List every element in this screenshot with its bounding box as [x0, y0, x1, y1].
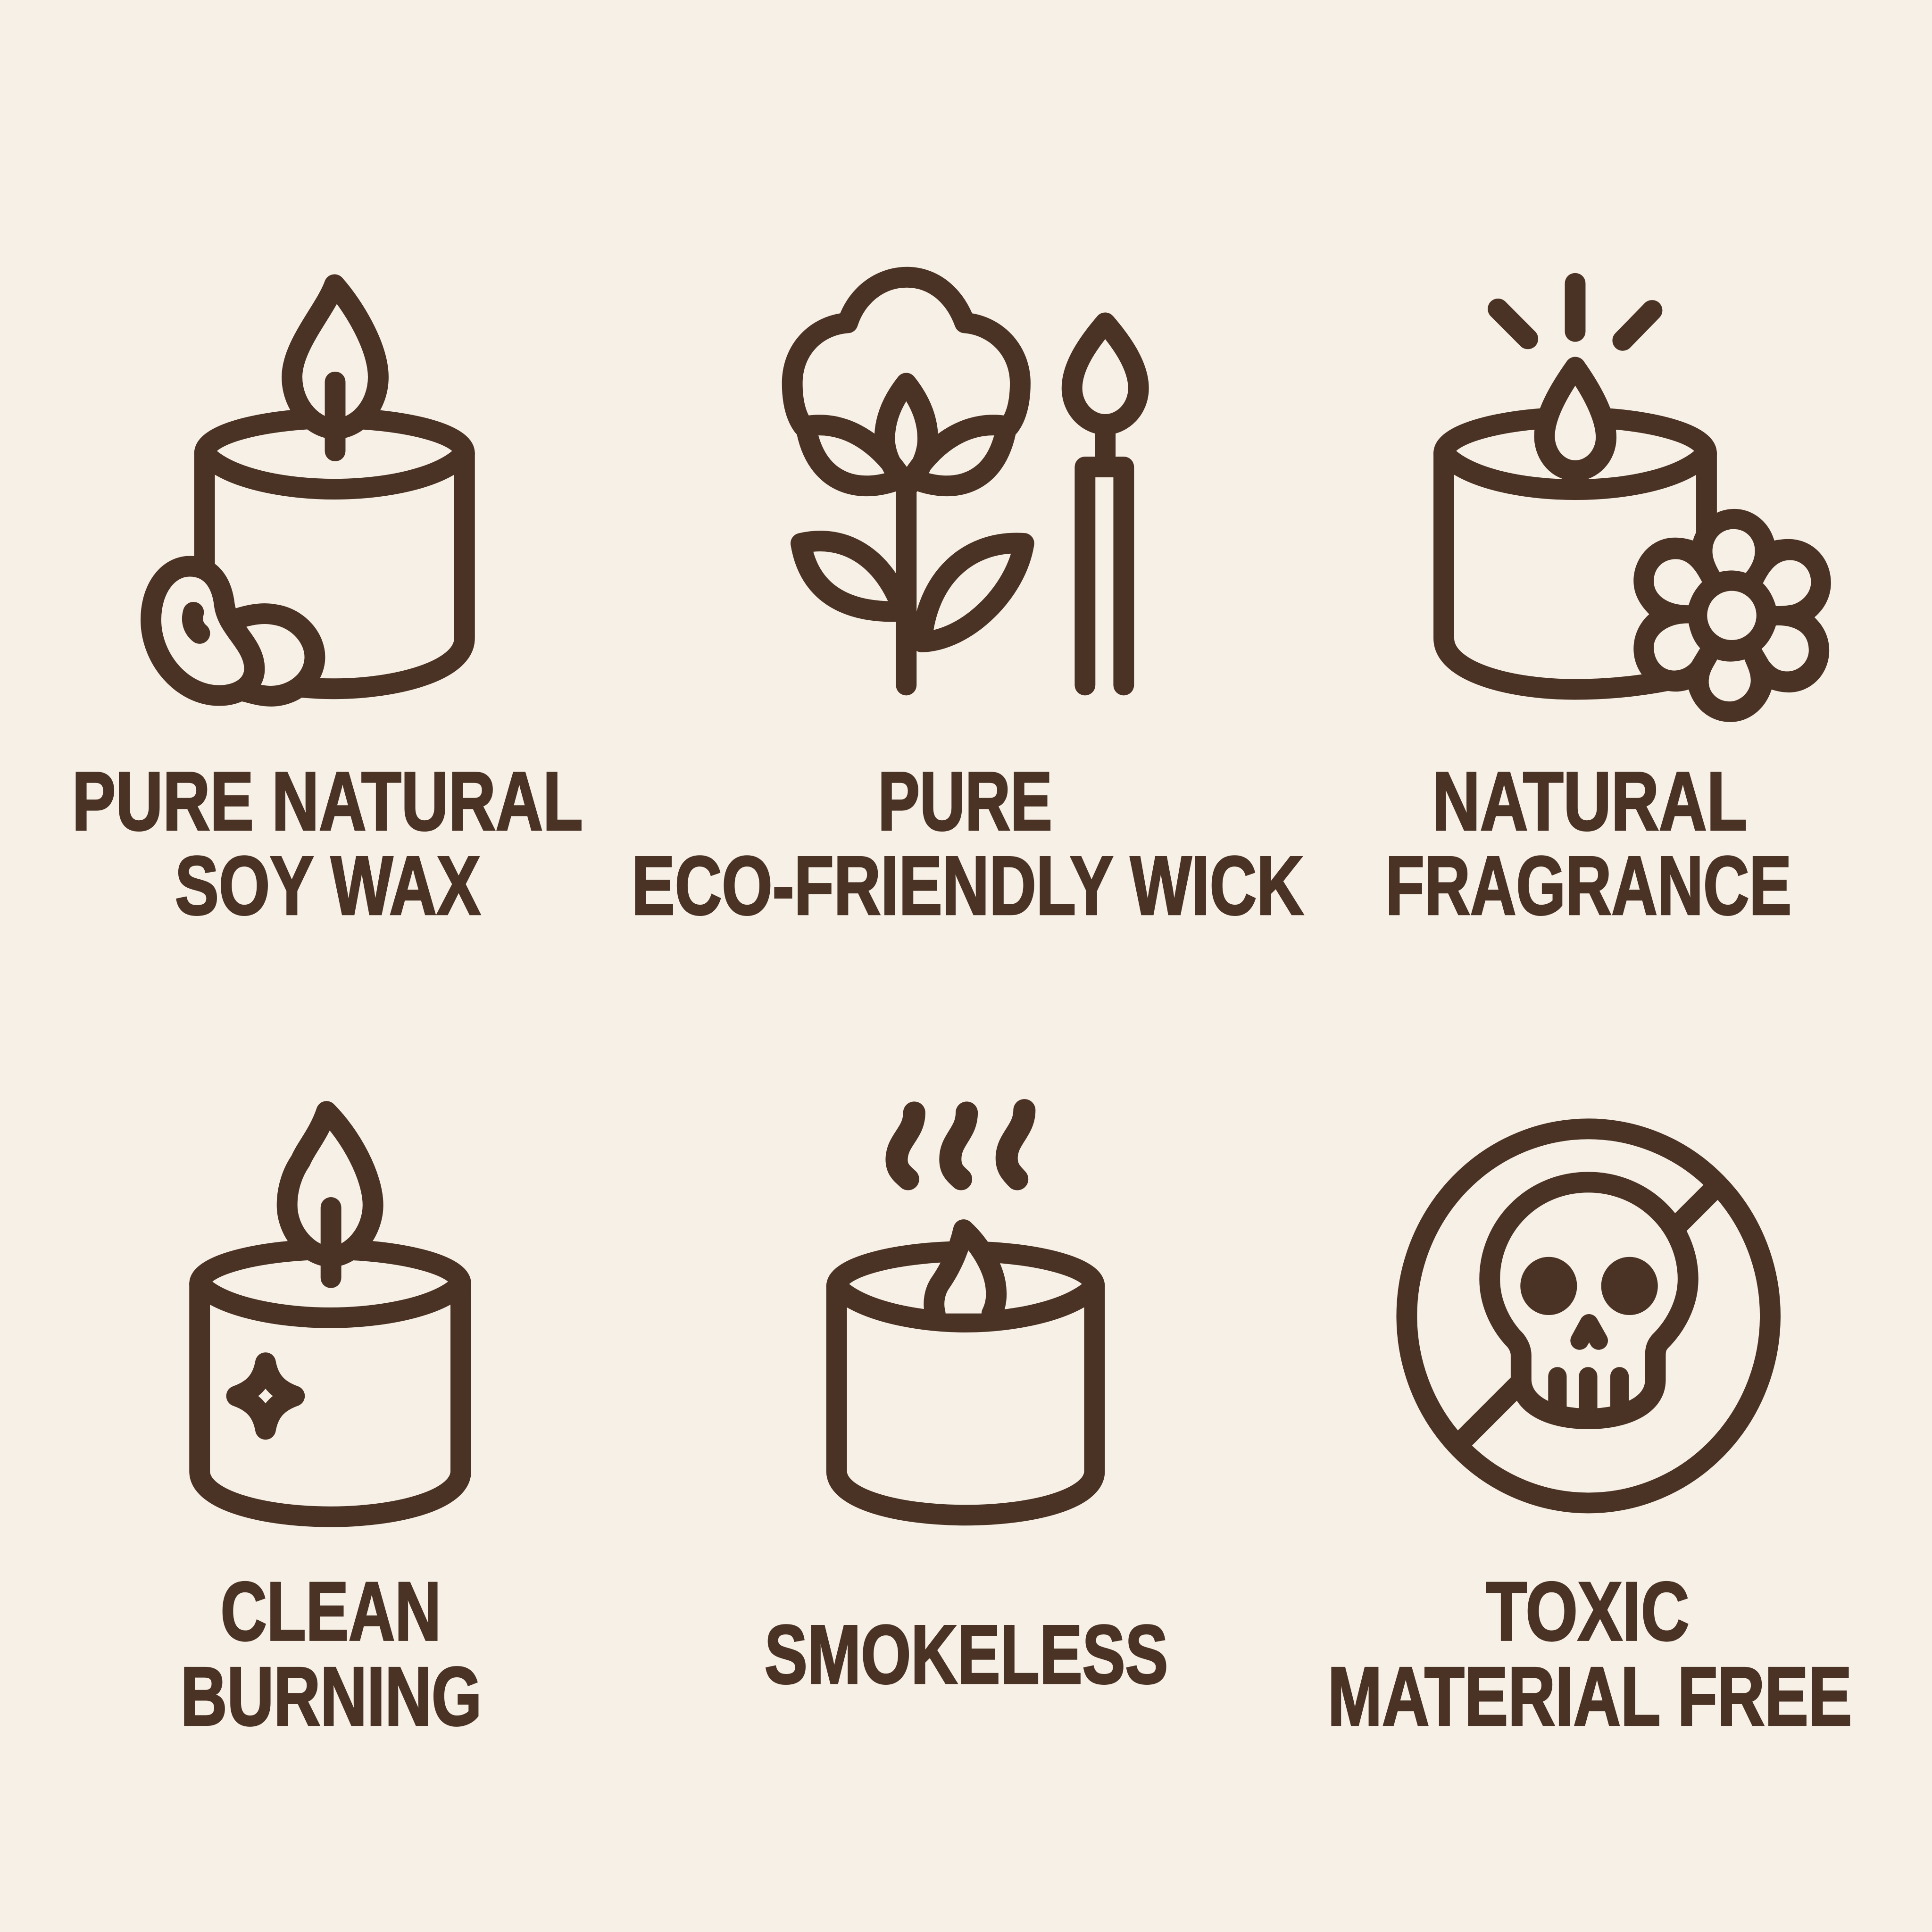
panel: natural fragrance	[1385, 283, 1831, 932]
icon: candle with flower and scent rays	[1444, 283, 1831, 722]
panel: pure natural soy wax	[72, 284, 583, 932]
heading: natural fragrance: FRAGRANCE	[1385, 839, 1791, 932]
heading: pure eco-friendly wick: PURE	[878, 755, 1052, 848]
panel: toxic material free	[1328, 1129, 1852, 1743]
heading: clean burning	[181, 1565, 482, 1743]
icon: candle with sparkle	[200, 1111, 461, 1517]
panel: pure eco-friendly wick	[632, 277, 1304, 932]
heading: pure natural soy wax	[72, 755, 583, 932]
heading: clean burning: CLEAN	[221, 1565, 441, 1658]
heading: clean burning: BURNING	[181, 1650, 482, 1743]
icon: candle with soy beans	[151, 284, 465, 696]
heading: pure natural soy wax: SOY WAX	[175, 839, 481, 932]
heading: natural fragrance: NATURAL	[1432, 755, 1747, 848]
heading: natural fragrance	[1385, 755, 1791, 932]
panel: clean burning	[181, 1111, 482, 1743]
heading: pure eco-friendly wick	[632, 755, 1304, 932]
heading: pure natural soy wax: PURE NATURAL	[72, 755, 583, 848]
heading: pure eco-friendly wick: ECO-FRIENDLY WICK	[632, 839, 1304, 932]
icon: crossed-out skull	[1407, 1129, 1770, 1503]
icon: candle with smoke wisps	[837, 1110, 1094, 1515]
heading: toxic material free	[1328, 1565, 1852, 1743]
panel: smokeless	[765, 1110, 1168, 1701]
heading: smokeless: SMOKELESS	[765, 1608, 1168, 1701]
heading: toxic material free: TOXIC	[1486, 1565, 1689, 1658]
icon: cotton plant and wick	[792, 277, 1139, 685]
